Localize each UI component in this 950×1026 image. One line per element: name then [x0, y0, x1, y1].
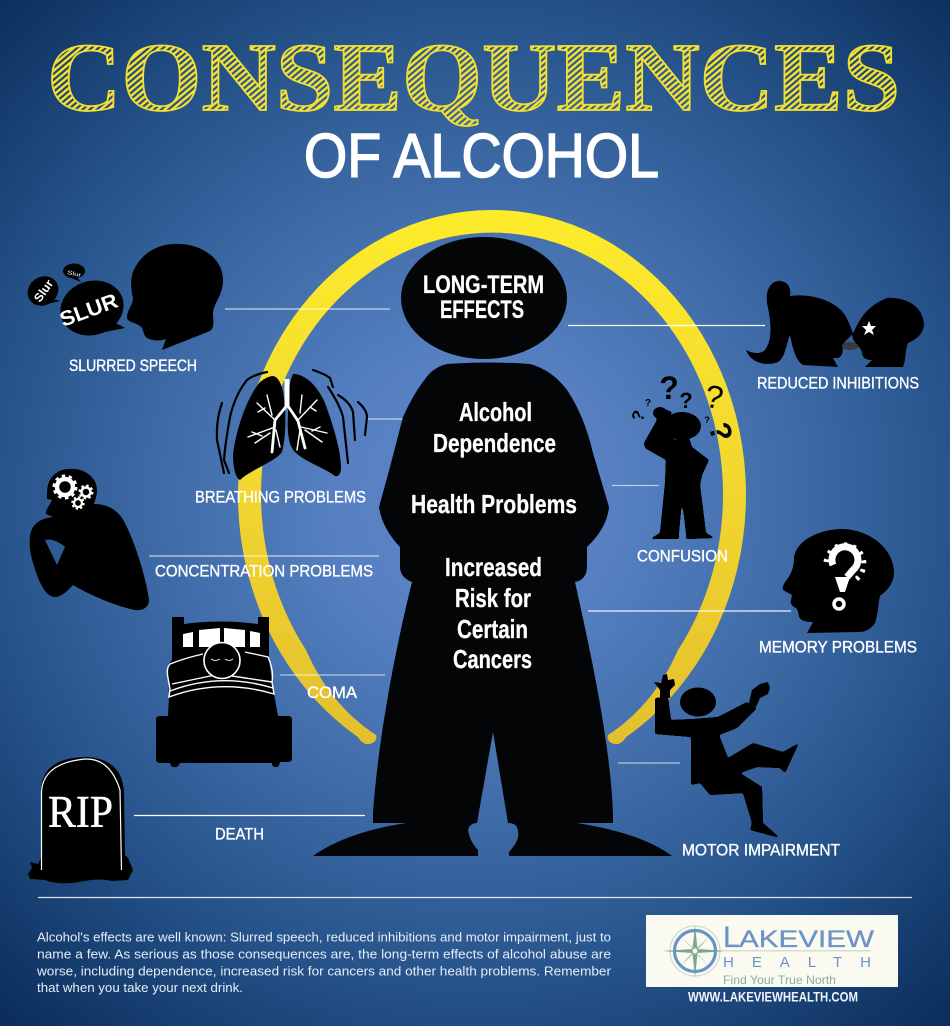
item: memory problems [759, 529, 917, 656]
text: lakeview: L [723, 921, 740, 954]
icon: kissing heads [746, 281, 924, 367]
icon: compass [662, 925, 727, 978]
heading: consequences: CONSEQUENCES [47, 24, 900, 132]
icon: bed [156, 617, 292, 767]
icon: question marks: ? [702, 419, 738, 445]
text block: footer paragraph: worse, including dependence, increased risk for cancers and other health problems. Remember [36, 964, 612, 978]
item: death [28, 757, 264, 883]
icon: question marks: ? [704, 415, 710, 425]
icon: confused person [644, 407, 715, 539]
text: tagline: Find Your True North [723, 973, 836, 987]
connector lines [38, 309, 912, 898]
text: alcohol dependence: Alcohol [459, 397, 532, 427]
central figure: long-term effects [313, 237, 672, 856]
text block: footer paragraph: that when you take your next drink. [37, 980, 243, 995]
text: increased risk for certain cancers: Certain [457, 614, 528, 644]
logo: lakeview health [646, 915, 898, 987]
icon: lungs [217, 370, 367, 480]
icon: speech bubbles [22, 264, 131, 344]
item: motor impairment [654, 674, 840, 860]
icon: gears [54, 476, 92, 509]
text: slur bubbles: Slur [31, 277, 56, 305]
label: CONCENTRATION PROBLEMS [155, 562, 373, 580]
icon: question marks: ? [702, 378, 726, 416]
label: MEMORY PROBLEMS [759, 638, 917, 656]
subheading: of alcohol: OF ALCOHOL [304, 122, 659, 191]
icon: tombstone [28, 757, 133, 883]
icon: question marks [628, 370, 738, 445]
text: lakeview [723, 921, 874, 954]
title: consequences of alcohol [47, 24, 900, 191]
icon: question marks: ? [645, 398, 651, 409]
text: alcohol dependence: Dependence [433, 428, 556, 458]
text: slur bubbles [31, 270, 121, 332]
text: lakeview: AKEVIEW [739, 926, 874, 953]
heading: long-term effects [423, 271, 544, 324]
label: COMA [307, 684, 357, 702]
label: SLURRED SPEECH [69, 357, 197, 375]
heading: long-term effects: LONG-TERM [423, 271, 544, 299]
icon: falling person [654, 674, 799, 838]
text: increased risk for certain cancers [445, 552, 542, 674]
label: CONFUSION [637, 548, 728, 566]
text: health: HEALTH [723, 954, 871, 971]
text: increased risk for certain cancers: Increased [445, 552, 542, 582]
item: confusion [628, 370, 738, 566]
text: health problems: Health Problems [411, 489, 577, 519]
item: slurred speech [22, 244, 223, 375]
label: MOTOR IMPAIRMENT [682, 842, 840, 860]
item: concentration problems [30, 469, 373, 610]
text: website url: WWW.LAKEVIEWHEALTH.COM [688, 990, 858, 1004]
label: REDUCED INHIBITIONS [757, 374, 919, 392]
icon: head with question mark [783, 529, 894, 633]
item: breathing problems [195, 370, 367, 506]
figure head [401, 237, 567, 359]
icon: question marks: ? [628, 408, 649, 424]
yellow ring [238, 210, 746, 744]
text block: footer paragraph [36, 930, 612, 995]
icon: thinking person [30, 469, 149, 610]
figure body [313, 362, 672, 856]
text: slur bubbles: Slur [67, 270, 82, 279]
icon: question marks: ? [659, 370, 679, 406]
label: DEATH [215, 826, 264, 844]
item: reduced inhibitions [746, 281, 924, 392]
text block: footer paragraph: name a few. As serious as those consequences are, the long-term effects of alcohol abuse are [37, 946, 611, 962]
text: slur bubbles: SLUR [57, 290, 121, 332]
text: increased risk for certain cancers: Risk for [455, 583, 531, 613]
text block: footer paragraph: Alcohol's effects are well known: Slurred speech, reduced inhibitions and motor impairment, just to [37, 930, 611, 944]
icon: talking head [127, 244, 223, 350]
text: alcohol dependence [433, 397, 556, 458]
icon: question marks: ? [679, 388, 693, 413]
text: increased risk for certain cancers: Cancers [453, 644, 532, 674]
text: rip: RIP [48, 787, 113, 837]
heading: long-term effects: EFFECTS [440, 296, 524, 324]
item: coma [156, 617, 357, 767]
label: BREATHING PROBLEMS [195, 488, 366, 506]
